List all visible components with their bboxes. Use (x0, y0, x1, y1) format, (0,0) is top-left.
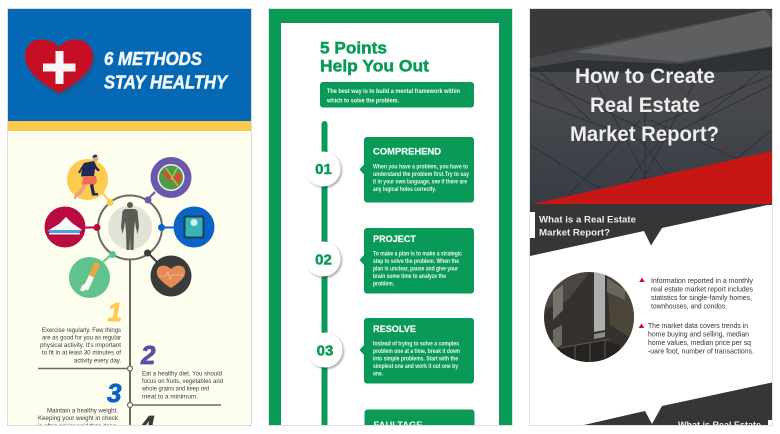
title: How to Create (575, 65, 715, 88)
timeline line (322, 121, 328, 431)
card: resolve: Instead of trying to solve a complex (373, 340, 459, 348)
card: project: To make a plan is to make a strategic (373, 250, 462, 258)
step 2: focus on fruits, vegetables and (142, 378, 223, 385)
panel: 6 methods stay healthy (8, 9, 251, 434)
bullet 1 (639, 276, 753, 310)
step 2: meat to a minimum. (142, 394, 198, 400)
card: comprehend: any logical holes correctly. (373, 186, 436, 193)
intro box (320, 82, 474, 108)
title (104, 52, 229, 89)
card: resolve (360, 318, 474, 384)
panel 3 outline (530, 8, 772, 426)
subtitle banner (530, 204, 772, 256)
icon: heart with pulse (150, 256, 192, 296)
step 1: physical activity. It's important (40, 342, 121, 349)
intro box: which to solve the problem. (326, 98, 399, 104)
panel: 5 points help you out (269, 9, 512, 434)
bullet 1: Information reported in a monthly (651, 276, 753, 285)
bullet 1: statistics for single-family homes, (651, 293, 752, 302)
timeline branches (38, 366, 221, 408)
step 3: 3 (107, 378, 122, 408)
step 1: to fit in at least 30 minutes of (42, 350, 121, 356)
card: comprehend (360, 137, 474, 202)
subtitle banner: What is a Real Estate (539, 214, 636, 224)
connector dots (94, 196, 165, 258)
title: 6 METHODS (104, 49, 202, 69)
bottom banner: What is Real Estate (678, 419, 761, 430)
step 1: activity every day. (74, 358, 121, 364)
card: resolve: RESOLVE (373, 324, 416, 335)
step 2: Eat a healthy diet. You should (142, 370, 222, 378)
card: comprehend: When you have a problem, you have to (373, 164, 468, 170)
title: Market Report? (570, 123, 719, 146)
card: resolve: simplest one and work it out one by (373, 363, 458, 370)
step 02 marker: 02 (315, 252, 332, 268)
step 3: is often easier said than done. (38, 423, 118, 430)
card: project: PROJECT (373, 234, 416, 245)
step 3: Maintain a healthy weight. (47, 408, 118, 414)
title: Real Estate (590, 94, 700, 117)
card: comprehend: it in your own language, see if there are (373, 178, 467, 186)
panel 1 outline (8, 8, 252, 426)
step 2: whole grains and keep red (141, 386, 209, 392)
card: project: problem. (373, 280, 394, 288)
yellow stripe (8, 121, 251, 131)
bullet 2 (639, 321, 754, 356)
step 2 (140, 345, 223, 398)
intro box: The best way is to build a mental framework within (327, 88, 460, 95)
icon: runner (67, 155, 108, 200)
bullet 2: -uare foot, number of transactions. (648, 346, 754, 356)
title (570, 65, 719, 146)
step 1: Exercise regularly. Few things (42, 327, 122, 334)
card: comprehend: COMPREHEND (373, 146, 441, 158)
connectors and center trunk (85, 192, 174, 425)
icon: broken cigarette (69, 257, 110, 298)
title: STAY HEALTHY (104, 72, 229, 92)
subtitle banner: Market Report? (539, 226, 610, 238)
step 03 marker (308, 332, 342, 368)
icon: weighing scale (174, 206, 214, 248)
step 01 marker (306, 152, 340, 186)
title (320, 38, 429, 76)
panel 2 outline (268, 8, 512, 426)
step 2: 2 (140, 340, 156, 370)
center body ring (98, 196, 162, 260)
red wedge (532, 151, 772, 204)
title: 5 Points (320, 38, 387, 58)
header band (8, 9, 251, 121)
step 3 (38, 383, 122, 425)
card: project: plan is unclear, pause and give your (373, 266, 458, 272)
bullet 2: home buying and selling, median (648, 330, 749, 338)
card: faultage: FAULTAGE (374, 420, 422, 431)
card: project: brain some time to analyze the (373, 273, 446, 280)
step 03 marker: 03 (317, 342, 333, 360)
icon: heart with cross (25, 40, 95, 97)
step 1: 1 (108, 297, 122, 327)
step 01 marker: 01 (315, 161, 332, 178)
card: resolve: one. (373, 370, 383, 378)
step 1: are as good for you as regular (42, 334, 122, 342)
panel: real estate market report (530, 9, 772, 430)
step 02 marker (306, 242, 340, 276)
building photo circle (544, 272, 634, 365)
bullet 2: home values, median price per sq (648, 338, 751, 347)
card: comprehend: understand the problem first.Try to say (373, 171, 469, 178)
bullet 1: real estate market report includes (651, 284, 753, 294)
card: resolve: into simple problems. Start with the (373, 356, 458, 362)
step 1 (40, 297, 122, 364)
bottom banner (584, 382, 772, 425)
bullet 1: townhouses, and condos. (651, 302, 727, 310)
icon: salt pile (44, 206, 86, 248)
bullet 2: The market data covers trends in (648, 321, 748, 330)
card: project (360, 228, 474, 294)
card: resolve: problem one at a time, break it down (373, 348, 460, 355)
icon: salad bowl (150, 157, 192, 198)
card: project: step to solve the problem. When the (373, 258, 459, 265)
header photo (530, 9, 772, 205)
title: Help You Out (320, 56, 429, 76)
card: faultage (364, 410, 474, 425)
inner white area (281, 23, 499, 425)
step 3: Keeping your weight in check (38, 415, 119, 422)
